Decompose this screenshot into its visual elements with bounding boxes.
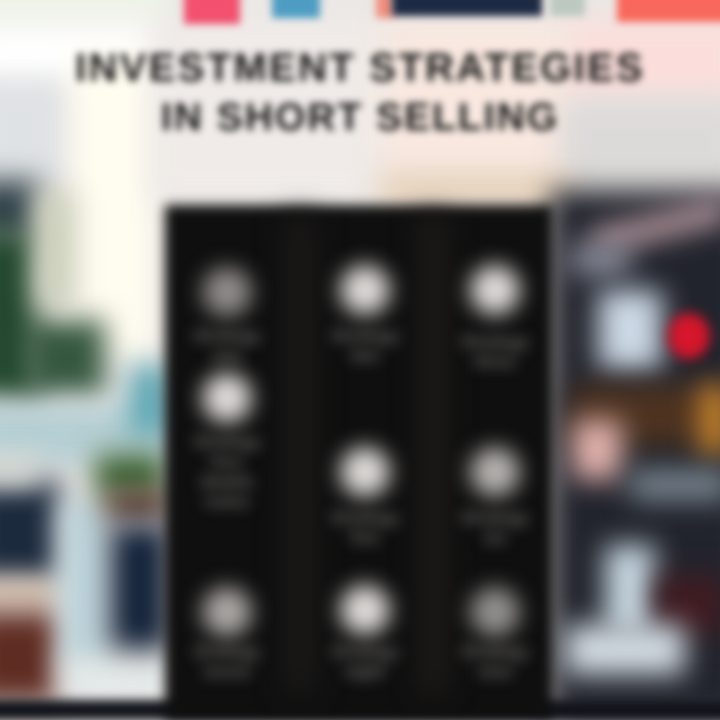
item 1: one <box>212 346 242 365</box>
item 1 <box>188 253 266 366</box>
item 7: Strategy <box>193 642 261 661</box>
item 6: six <box>483 528 507 547</box>
item 2: two <box>350 346 380 365</box>
item 9 <box>456 573 534 683</box>
title: INVESTMENT STRATEGIES <box>75 46 645 90</box>
item 2: Strategy <box>331 326 399 345</box>
icon: red circle <box>668 313 710 359</box>
bottom dark strip <box>0 700 720 720</box>
item 4: notes <box>204 492 250 511</box>
item 5 <box>324 431 406 549</box>
item 7 <box>188 572 266 683</box>
item 5: Strategy <box>331 508 399 527</box>
item 4: details <box>200 472 254 491</box>
item 1: Strategy <box>193 326 261 345</box>
item 8: Strategy <box>331 642 399 661</box>
item 9: Strategy <box>461 642 529 661</box>
title: IN SHORT SELLING <box>161 96 559 139</box>
item 6 <box>455 432 535 548</box>
item 3: three <box>474 352 516 371</box>
item 8: eight <box>345 662 385 681</box>
item 3 <box>454 249 536 373</box>
item 7: seven <box>203 662 251 681</box>
item 4 <box>186 358 268 513</box>
item 5: five <box>350 528 380 547</box>
item 4: Strategy <box>193 432 261 451</box>
item 6: Strategy <box>461 508 529 527</box>
item 2 <box>324 249 406 367</box>
item 4: four <box>210 452 244 471</box>
title <box>71 46 647 139</box>
item 8 <box>324 569 406 686</box>
item 3: Strategy <box>461 332 529 351</box>
top strip of coloured shapes <box>178 0 720 30</box>
item 9: nine <box>478 662 512 681</box>
